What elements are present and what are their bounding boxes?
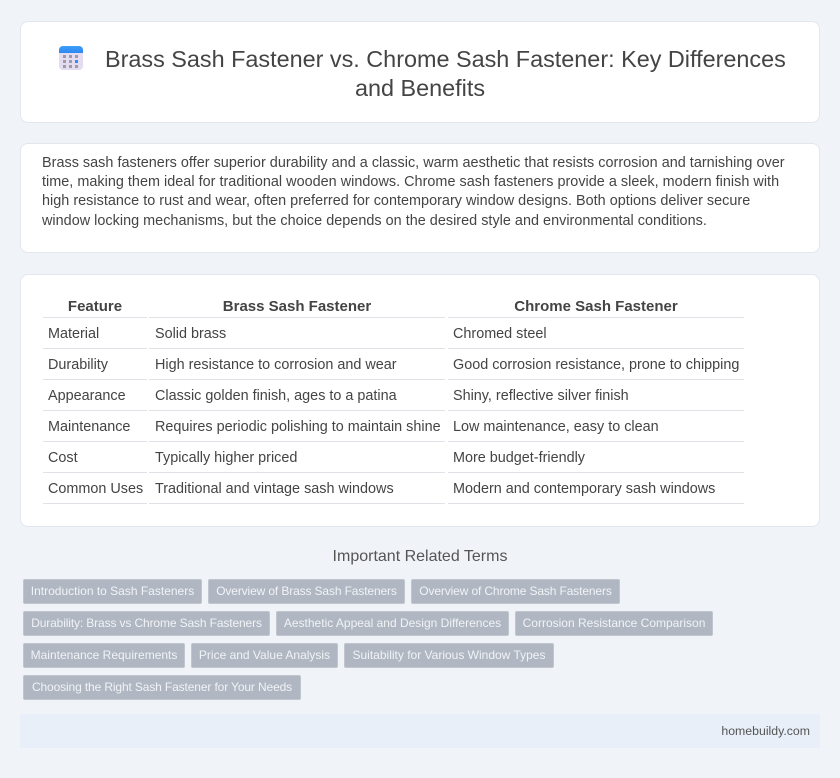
row: cost <box>48 450 585 466</box>
tag <box>23 675 301 700</box>
row: cost: More budget-friendly <box>453 450 585 466</box>
row: common uses: Modern and contemporary sash windows <box>453 481 715 497</box>
row: common uses <box>48 481 715 497</box>
title: Brass Sash Fastener vs. Chrome Sash Fastener: Key Differences <box>105 46 786 72</box>
tag <box>23 611 270 636</box>
tag <box>411 579 620 604</box>
tag <box>191 643 338 668</box>
tag: Suitability for Various Window Types <box>352 648 545 662</box>
panel: related term tags <box>23 579 713 700</box>
text block: introduction <box>42 155 785 229</box>
tag: Maintenance Requirements <box>31 648 177 662</box>
tag: Corrosion Resistance Comparison <box>523 616 705 630</box>
text block: introduction: window locking mechanisms, but the choice depends on the desired style and environmental conditions. <box>42 213 707 229</box>
tag <box>23 579 202 604</box>
tag: Choosing the Right Sash Fastener for Your Needs <box>32 680 292 694</box>
icon: calendar <box>59 46 83 70</box>
row: durability: Good corrosion resistance, prone to chipping <box>453 357 739 373</box>
title <box>105 46 786 101</box>
row: appearance <box>48 388 629 404</box>
heading: related terms: Important Related Terms <box>333 548 507 565</box>
row: material: Solid brass <box>155 326 226 342</box>
panel: comparison table <box>20 274 820 527</box>
tag: Overview of Brass Sash Fasteners <box>216 584 397 598</box>
text block: introduction: time, making them ideal for traditional wooden windows. Chrome sash fasteners provide a sleek, modern finish with <box>42 174 779 190</box>
tag <box>208 579 405 604</box>
row: common uses: Common Uses <box>48 481 143 497</box>
panel: header <box>20 21 820 123</box>
table header: Chrome Sash Fastener <box>514 298 678 315</box>
row: material: Material <box>48 326 99 342</box>
row: common uses: Traditional and vintage sash windows <box>155 481 394 497</box>
table header: Feature <box>68 298 122 315</box>
row: appearance: Appearance <box>48 388 126 404</box>
row: material <box>48 326 547 342</box>
row: durability: Durability <box>48 357 108 373</box>
panel: introduction <box>20 143 820 253</box>
tag: Price and Value Analysis <box>199 648 330 662</box>
row: durability <box>48 357 739 373</box>
footer source text: homebuildy.com <box>721 724 810 738</box>
text block: introduction: high resistance to rust and wear, often preferred for contemporary window designs. Both options deliver secure <box>42 193 750 209</box>
tag <box>515 611 713 636</box>
text block: introduction: Brass sash fasteners offer superior durability and a classic, warm aesthetic that resists corrosion and tarnishing over <box>42 155 785 171</box>
tag: Introduction to Sash Fasteners <box>31 584 194 598</box>
row: appearance: Shiny, reflective silver finish <box>453 388 629 404</box>
title: and Benefits <box>355 75 485 101</box>
table header <box>68 298 678 315</box>
row: durability: High resistance to corrosion and wear <box>155 357 397 373</box>
row: material: Chromed steel <box>453 326 547 342</box>
footer <box>20 714 820 748</box>
tag <box>344 643 554 668</box>
row: appearance: Classic golden finish, ages to a patina <box>155 388 397 404</box>
row: maintenance: Maintenance <box>48 419 130 435</box>
tag: Aesthetic Appeal and Design Differences <box>284 616 501 630</box>
row: maintenance: Requires periodic polishing to maintain shine <box>155 419 441 435</box>
row: cost: Typically higher priced <box>155 450 297 466</box>
tag: Overview of Chrome Sash Fasteners <box>419 584 612 598</box>
tag: Durability: Brass vs Chrome Sash Fasteners <box>31 616 262 630</box>
tag <box>23 643 185 668</box>
table header: Brass Sash Fastener <box>223 298 371 315</box>
row: maintenance <box>48 419 659 435</box>
row: cost: Cost <box>48 450 78 466</box>
row: maintenance: Low maintenance, easy to clean <box>453 419 659 435</box>
tag <box>276 611 509 636</box>
